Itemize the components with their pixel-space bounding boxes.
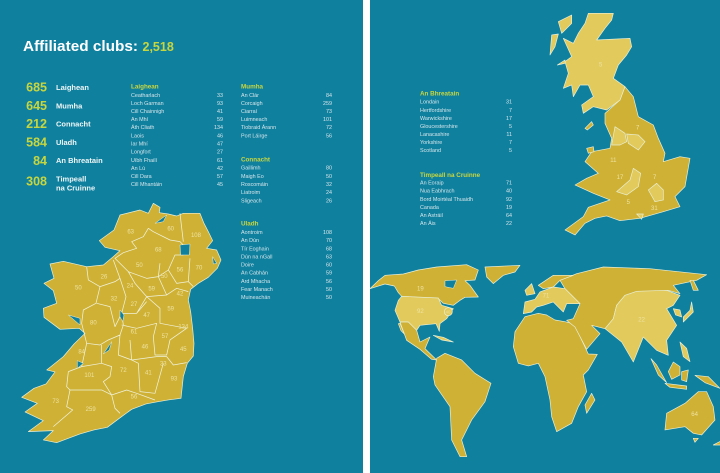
table: Mumha: An Clár xyxy=(241,93,259,99)
table: Laighean: An Lú xyxy=(131,166,145,172)
table: Connacht: 80 xyxy=(326,166,332,172)
table: Connacht: Gaillimh xyxy=(241,166,260,172)
table: Timpeall na Cruinne: Bord Moirtéal Thuaidh xyxy=(420,197,473,203)
table: An Bhreatain: Hertfordshire xyxy=(420,108,451,114)
world numbers xyxy=(417,287,699,418)
table: An Bhreatain: 17 xyxy=(506,116,512,122)
table: Uladh: Muineachán xyxy=(241,295,270,301)
table: Connacht xyxy=(241,156,332,204)
table: Timpeall na Cruinne: 19 xyxy=(506,205,512,211)
province totals: 685 xyxy=(26,80,47,94)
county numbers: 84 xyxy=(78,350,86,356)
table: Mumha: Corcaigh xyxy=(241,101,263,107)
table: Laighean: Iar Mhí xyxy=(131,142,148,148)
table: Timpeall na Cruinne: Timpeall na Cruinne xyxy=(420,172,481,179)
county numbers: 50 xyxy=(136,263,143,269)
Britain numbers: 5 xyxy=(599,63,603,69)
province totals: Laighean xyxy=(56,83,89,92)
table: Uladh: Doire xyxy=(241,262,254,268)
county numbers: 63 xyxy=(127,230,135,236)
county numbers: 46 xyxy=(142,345,149,351)
table: Timpeall na Cruinne xyxy=(420,172,512,227)
table: An Bhreatain: Yorkshire xyxy=(420,140,442,146)
table: Mumha xyxy=(241,84,332,140)
table: Uladh: 70 xyxy=(326,238,332,244)
table: Laighean: Ceatharlach xyxy=(131,93,160,99)
table: Laighean: 33 xyxy=(217,93,223,99)
province totals: An Bhreatain xyxy=(56,156,103,165)
Britain numbers: 31 xyxy=(651,206,658,212)
Britain numbers: 7 xyxy=(653,175,657,181)
county numbers: 72 xyxy=(120,368,127,374)
table: Timpeall na Cruinne: An Astráil xyxy=(420,213,443,219)
table: Timpeall na Cruinne: 71 xyxy=(506,180,512,186)
table: An Bhreatain: 5 xyxy=(509,124,512,130)
table: Uladh: Tír Eoghain xyxy=(241,246,269,252)
table: Connacht: Roscomáin xyxy=(241,182,268,188)
table: Mumha: Tiobraid Árann xyxy=(241,124,276,131)
province totals: 584 xyxy=(26,136,47,150)
table: Laighean: 57 xyxy=(217,174,223,180)
county numbers: 50 xyxy=(161,274,168,280)
table: Connacht: 32 xyxy=(326,182,332,188)
table: An Bhreatain: An Bhreatain xyxy=(420,90,459,98)
panel: left background xyxy=(0,0,363,473)
county numbers: 47 xyxy=(143,313,151,319)
county numbers: 259 xyxy=(86,407,96,413)
table: Mumha: 73 xyxy=(326,109,332,115)
county numbers: 70 xyxy=(196,265,203,271)
table: Laighean: 134 xyxy=(214,125,223,131)
county numbers: 101 xyxy=(84,373,95,379)
world numbers: 40 xyxy=(446,310,451,315)
world numbers: 22 xyxy=(638,318,646,324)
table: Laighean: Laighean xyxy=(131,84,159,90)
table: Timpeall na Cruinne: Nua Eabhrach xyxy=(420,188,454,194)
table: Uladh: 56 xyxy=(326,279,332,285)
panel: right background xyxy=(370,0,720,473)
table: Laighean: Loch Garman xyxy=(131,101,164,107)
table: Uladh: Fear Manach xyxy=(241,287,273,293)
province totals: 212 xyxy=(26,117,47,131)
county numbers: 59 xyxy=(148,286,156,292)
province totals: 84 xyxy=(33,154,47,168)
map: world xyxy=(370,265,720,457)
table: Uladh: An Dún xyxy=(241,238,259,244)
table: Timpeall na Cruinne: 40 xyxy=(506,188,512,194)
table: An Bhreatain: Warwickshire xyxy=(420,116,452,122)
table: Laighean: Áth Cliath xyxy=(131,124,154,131)
table: Uladh xyxy=(241,220,332,301)
table: An Bhreatain: 7 xyxy=(509,108,512,114)
county numbers: 32 xyxy=(111,297,118,303)
table: Mumha: 72 xyxy=(326,125,332,131)
province totals xyxy=(26,80,103,192)
table: Laighean: 45 xyxy=(217,182,223,188)
table: An Bhreatain: Gloucestershire xyxy=(420,124,458,130)
table: Laighean: 61 xyxy=(217,158,223,164)
table: Uladh: Ard Mhacha xyxy=(241,279,270,285)
title: Affiliated clubs: xyxy=(23,38,138,55)
county numbers: 50 xyxy=(75,286,82,292)
table: An Bhreatain: Scotland xyxy=(420,148,441,154)
table: Laighean: An Mhí xyxy=(131,117,149,123)
Britain numbers: 7 xyxy=(636,125,640,131)
table: Timpeall na Cruinne: 22 xyxy=(506,221,512,227)
table: Uladh: Uladh xyxy=(241,220,259,228)
table: Uladh: An Cabhán xyxy=(241,270,268,276)
table: Timpeall na Cruinne: 64 xyxy=(506,213,512,219)
world numbers: 64 xyxy=(691,412,699,418)
province totals: 645 xyxy=(26,99,47,113)
table: An Bhreatain: 5 xyxy=(509,148,512,154)
county numbers: 27 xyxy=(131,302,138,308)
table: Laighean: Cill Mhantáin xyxy=(131,182,162,188)
table: Uladh: 108 xyxy=(323,230,332,236)
county numbers: 60 xyxy=(167,226,175,232)
county numbers: 56 xyxy=(177,267,184,273)
table: Laighean: Cill Dara xyxy=(131,174,152,180)
table: Mumha: 56 xyxy=(326,134,332,140)
county numbers: 26 xyxy=(101,275,108,281)
county numbers: 93 xyxy=(171,376,178,382)
county numbers: 45 xyxy=(180,347,187,353)
table: Connacht: Liatroim xyxy=(241,190,261,196)
county numbers: 61 xyxy=(131,330,138,336)
table: Connacht: 50 xyxy=(326,174,332,180)
table: Laighean: Uíbh Fhailí xyxy=(131,158,158,164)
province totals: na Cruinne xyxy=(56,184,95,192)
table: Laighean xyxy=(131,84,223,188)
table: Laighean: Laois xyxy=(131,134,144,140)
county numbers: 56 xyxy=(131,395,138,401)
table: Uladh: 50 xyxy=(326,295,332,301)
county numbers: 80 xyxy=(90,320,97,326)
table: Timpeall na Cruinne: 92 xyxy=(506,197,512,203)
county numbers xyxy=(52,226,203,413)
table: Uladh: 60 xyxy=(326,262,332,268)
table: Mumha: 84 xyxy=(326,93,332,99)
table: Mumha: 101 xyxy=(323,117,332,123)
county numbers: 42 xyxy=(177,291,184,297)
table: Mumha: 259 xyxy=(323,101,332,107)
table: Laighean: 47 xyxy=(217,142,223,148)
county numbers: 68 xyxy=(155,247,162,253)
Britain numbers: 17 xyxy=(617,175,624,181)
world numbers: 92 xyxy=(417,309,424,315)
table: Connacht: Maigh Eo xyxy=(241,174,264,180)
province totals: Connacht xyxy=(56,120,91,128)
table: Connacht: Sligeach xyxy=(241,198,262,204)
county numbers: 134 xyxy=(178,325,189,331)
table: Connacht: Connacht xyxy=(241,156,271,164)
province totals: Mumha xyxy=(56,102,83,110)
province totals: Timpeall xyxy=(56,174,86,184)
table: Laighean: 27 xyxy=(217,150,223,156)
Britain numbers xyxy=(599,63,658,212)
table: Laighean: 46 xyxy=(217,134,223,140)
table: Timpeall na Cruinne: An Eoraip xyxy=(420,180,444,186)
title: 2,518 xyxy=(142,40,174,54)
world numbers: 71 xyxy=(543,294,550,300)
table: An Bhreatain: 11 xyxy=(506,132,512,138)
map: Ireland counties xyxy=(22,203,221,443)
table: Laighean: Cill Chainnigh xyxy=(131,109,164,115)
province totals: Uladh xyxy=(56,138,77,147)
table: Uladh: Aontroim xyxy=(241,230,263,236)
table: An Bhreatain: Lanacashire xyxy=(420,132,449,138)
county numbers: 33 xyxy=(160,361,167,367)
table: Connacht: 24 xyxy=(326,190,332,196)
county numbers: 73 xyxy=(52,399,60,405)
table: Laighean: 42 xyxy=(217,166,223,172)
table: Uladh: 50 xyxy=(326,287,332,293)
county numbers: 108 xyxy=(191,233,202,239)
table: An Bhreatain: 31 xyxy=(506,100,512,106)
county numbers: 57 xyxy=(162,334,169,340)
table: Mumha: Port Láirge xyxy=(241,134,267,140)
table: Timpeall na Cruinne: Canada xyxy=(420,205,439,211)
table: Laighean: 59 xyxy=(217,117,223,123)
province totals: 308 xyxy=(26,174,47,188)
table: Uladh: Dún na nGall xyxy=(241,254,272,260)
table: Uladh: 68 xyxy=(326,246,332,252)
table: Uladh: 63 xyxy=(326,254,332,260)
table: Uladh: 59 xyxy=(326,270,332,276)
county numbers: 59 xyxy=(167,306,175,312)
table: An Bhreatain: 7 xyxy=(509,140,512,146)
table: Mumha: Luimneach xyxy=(241,117,267,123)
county numbers: 41 xyxy=(145,370,152,376)
table: Laighean: 41 xyxy=(217,109,223,115)
map: Britain xyxy=(550,13,690,235)
Britain numbers: 5 xyxy=(627,200,631,206)
table: Mumha: Mumha xyxy=(241,84,264,90)
table: An Bhreatain xyxy=(420,90,512,154)
county numbers: 24 xyxy=(127,284,134,290)
table: An Bhreatain: Londain xyxy=(420,100,439,106)
table: Laighean: Longfort xyxy=(131,150,151,156)
table: Connacht: 26 xyxy=(326,198,332,204)
Britain numbers: 11 xyxy=(610,158,617,164)
table: Mumha: Ciarraí xyxy=(241,109,258,115)
world numbers: 19 xyxy=(417,287,424,293)
table: Timpeall na Cruinne: An Áis xyxy=(420,220,436,227)
table: Laighean: 93 xyxy=(217,101,223,107)
